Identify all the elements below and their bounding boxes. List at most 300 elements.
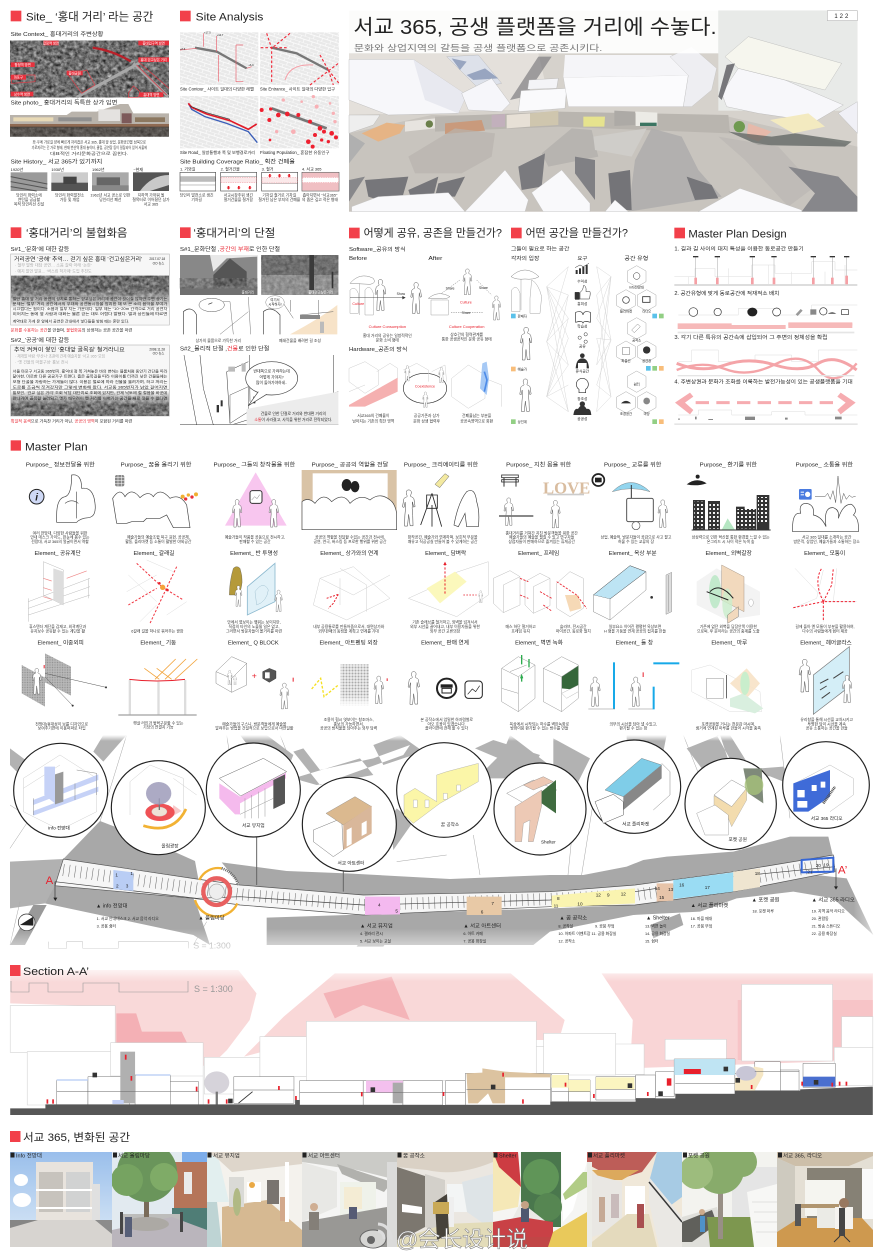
sketch: blocked alley: 어떻게 가야지?	[259, 374, 284, 379]
pink watercolor sky	[10, 965, 873, 1068]
circle: radio: 서교 365 라디오	[811, 815, 843, 822]
element: windows	[588, 662, 679, 709]
label: conflict 1: S#1_‘문화’에 대한 갈등	[11, 245, 69, 253]
timeline: four history photos: 서교 365	[144, 202, 158, 207]
heading: transformed spaces: 서교 365, 변화된 공간	[23, 1131, 130, 1144]
element: art painting facade	[312, 664, 388, 706]
requirement icons: 창조성	[577, 396, 587, 401]
news clipping 2: 도로를 조금씩 쪼겨갔지만 그렇게 변화해 왔다. 서교동 365번지가 낡았 길어지면	[13, 384, 167, 389]
heading: space: 어떤 공간을 만들건가?	[526, 228, 628, 240]
panel: hero aerial render	[349, 10, 857, 212]
element captions row 2: 공유 소통하는 공간을 만들	[806, 726, 848, 731]
panel: sharing, space, master plan design	[349, 227, 858, 425]
panel: site and site analysis	[10, 10, 339, 207]
space type hexagons: 마당	[644, 411, 650, 416]
diagram: coverage ratio strips: 3. 철거	[262, 166, 274, 172]
element captions row 2: 방화이용 환기될 수 있는 방수를 만들	[510, 726, 569, 731]
step 1	[674, 245, 857, 285]
plan labels: 4. 갤러리 전시	[360, 931, 383, 936]
purpose 5: creators	[403, 474, 479, 527]
matrix labels: 각자의 입장	[511, 254, 540, 262]
element: roof	[593, 566, 672, 620]
software sharing labels	[349, 245, 443, 262]
section drawing	[10, 965, 873, 1115]
plan labels: ▲ 포켓 공원	[752, 896, 780, 904]
circle: pocket park	[685, 758, 776, 850]
plan labels: 16. 마을 매대	[691, 916, 713, 921]
space type hexagons: 공작소	[632, 338, 641, 343]
coloured programme rooms: 2	[116, 883, 119, 888]
heading: section	[10, 965, 89, 978]
space type hexagons: info전망대	[629, 285, 644, 290]
sketch captions: 상가의 물품으로 가득찬 거리	[196, 338, 242, 343]
timeline: four history photos: 당인리선 폐선	[99, 197, 122, 202]
aerial photo with red tags: 홍대역 방면	[143, 92, 159, 97]
photo 2: plaza	[112, 1152, 207, 1247]
sketch: blocked alley: 건물로 인한 단절로 거리와 반대편 거리의	[261, 411, 326, 416]
purpose captions: 예술가들이 작품을 공동으로 전시하고,	[225, 535, 285, 540]
purpose headings: Purpose_ 크리에이티를 위한	[404, 461, 478, 469]
sketch: hardware 3: 건폐율남는 부분을	[462, 413, 492, 418]
heading: master plan: Master Plan	[25, 442, 88, 454]
sketch captions	[196, 338, 321, 343]
translucent building shadows	[349, 128, 857, 212]
scale label: S = 1:300	[193, 941, 231, 951]
requirement icons: 공유	[579, 345, 586, 349]
element: shop link	[313, 567, 390, 620]
purpose headings: Purpose_ 그들의 창작물을 위한	[213, 461, 295, 469]
plan labels: 17. 공용 부엌	[691, 923, 713, 928]
sketch: hardware 2: Coexistence	[415, 384, 435, 388]
element captions row 2: 포켓공원을 거니는 천분감 마시며,	[702, 721, 755, 726]
element: forked road	[127, 560, 190, 625]
diagram: coverage ratio strips	[180, 166, 339, 202]
step 4: 4. 주변상권과 문화가 조화를 이룩하는 발전가능성이 있는 공생플랫폼을 기대	[674, 378, 853, 386]
element captions row 1: H 형을 기둥을 연계 공공의 접지를 만들	[604, 628, 666, 633]
space type hexagons: 공연장	[642, 358, 651, 363]
page number	[827, 11, 857, 21]
section buildings	[57, 1059, 835, 1105]
graphic scale	[48, 942, 188, 948]
dark person icons	[93, 1067, 818, 1103]
purpose headings	[26, 461, 853, 469]
coloured programme rooms: 11	[554, 904, 559, 909]
photo labels: 서교 아트센터	[308, 1152, 340, 1160]
street photo right: 홍대걷고싶은거리	[308, 290, 333, 295]
plan labels: 9. 공용 부엌	[595, 923, 615, 928]
timeline: four history photos: 철목터로 이어졌던 상가	[132, 197, 170, 202]
label: physical disconnection: S#2_물리적 단절 ,건물로 인한 단절	[180, 344, 269, 352]
element captions row 2: 햇살 러인과 쌓혁구분할 수 있는	[133, 720, 184, 725]
heading: master plan design: Master Plan Design	[688, 228, 787, 240]
purpose captions: 상상력으로 인한 혁신을 통한 환경을 느낄 수 있는	[692, 535, 770, 540]
requirement icons: 흥미성	[577, 301, 587, 306]
purpose captions: 예술가들의 예술을 펼칠 수 있고 연구자들	[509, 535, 575, 540]
news clipping 2: · ‘옛 건물의 마을구성’ 홍보 전시	[15, 358, 69, 364]
purpose 2: dreams	[113, 475, 198, 528]
label: site context: Site Context_ 홍대거리의 주변상황	[11, 30, 103, 38]
plan labels: 10. 아파트 이벤트장 11. 공용 화장실	[558, 931, 617, 936]
circle: info tower: info 전망대	[48, 824, 70, 831]
element: sales link	[408, 672, 482, 704]
plan labels: 20. 관람동	[812, 916, 829, 921]
element captions row 2: 유리창을 통해 시선을 교차시키고	[800, 717, 853, 722]
plan labels: ▲ Shelter	[646, 916, 670, 922]
photo 3: museum	[207, 1152, 302, 1247]
news clipping 1: 문제는 ‘철부’ 거리 공간에서의 무대와 공연동시장을 방치한 채 또 큰 소리 음악을 부여가	[13, 301, 168, 306]
diagram: after: Culture Cooperation	[449, 324, 485, 329]
title box	[349, 10, 718, 53]
coloured programme rooms: 18	[755, 871, 760, 876]
element captions row 1: 기존에 없던 외벽을 담장안쪽 이용한	[700, 624, 757, 629]
diagram: after: Share	[446, 286, 455, 290]
element headings row 2: Element_ 들 창	[616, 639, 653, 647]
timeline: four history photos	[11, 166, 170, 207]
captions: site analysis maps: Site Road_ 일방통행과 쪽 및 보행경로거리	[180, 149, 255, 155]
captions: site analysis maps	[180, 86, 335, 155]
circle: dream workshop	[397, 743, 491, 837]
element headings row 1: Element_ 갈래길	[133, 549, 175, 557]
photo 4: art center	[302, 1152, 397, 1247]
step 3	[674, 333, 857, 378]
diagram: coverage ratio strips: 1. 기와길	[180, 166, 196, 172]
map: site entrance	[260, 32, 339, 85]
element captions row 1: 다수의 사람들에게 쉼터 제공	[802, 628, 848, 633]
photo 6: shelter	[493, 1152, 587, 1247]
element captions row 2: 조용이 협시 엿보이는 창조마스,	[324, 717, 374, 722]
diagram: after: 통한 공생공작인 문화 공유 형태	[442, 337, 492, 342]
fade edges	[0, 735, 890, 965]
map: site contour	[180, 30, 258, 85]
sketch: blocked alley: 많이 돌아가야하네..	[256, 380, 287, 385]
page number: 122	[834, 14, 850, 20]
element headings row 1: Element_ 프레임	[518, 549, 559, 557]
software sharing labels: After	[428, 256, 443, 262]
element headings row 2	[38, 639, 852, 647]
aerial photo with red tags: 홍대 걷고싶은 거리	[140, 57, 167, 62]
wall ticks	[63, 863, 833, 905]
element captions row 2: 공공의 방직물을 담아주는 외부 담벽	[320, 726, 378, 731]
plan labels: 6. 아트 카페	[463, 931, 483, 936]
north compass	[18, 914, 35, 931]
panel: plan with axonometric circles	[0, 735, 890, 965]
panel: section A-A'	[10, 965, 873, 1115]
purpose captions: 허물 수 있는 교류의 장	[618, 539, 654, 544]
circle: plaza: 올림광장	[161, 843, 179, 850]
diagram: after: 상호간의 협력관계를	[450, 332, 484, 337]
diagram: before: Culture	[352, 302, 364, 306]
element captions row 1: 직접의 타인의 노출될 일은 없고,	[228, 624, 280, 629]
element headings row 1: Element_ 상가와의 연계	[320, 549, 378, 557]
element captions row 2: 아오 호광이 있겠습니다.	[427, 721, 466, 726]
coloured programme rooms: 3	[126, 883, 129, 888]
circle: museum	[206, 743, 300, 837]
red figures	[47, 1055, 847, 1104]
panel: transformed spaces	[10, 1131, 873, 1247]
label: site photo: Site photo_ 홍대거리의 독특한 상가 입면	[11, 99, 117, 107]
coloured programme rooms: 9	[607, 892, 610, 897]
shop row along the street	[362, 111, 852, 147]
timeline: four history photos: 1962년 서교 공소로 인한	[90, 193, 131, 198]
news clipping 2: 추억 켜켜이 쌓인 ‘홍대앞 골목길’ 철거라니요	[14, 346, 125, 354]
label: conflict 2: S#2_‘공공’에 대한 갈등	[11, 336, 69, 344]
step 2: 2. 공간유형에 맞게 동로공간에 적재적소 배치	[674, 289, 780, 297]
plan labels: 8. 공작실	[558, 923, 574, 928]
plan labels: 1. 서교 안내데스크 2. 서교 음악 라디오	[97, 916, 159, 921]
purpose captions: 활동, 플리마켓 등 소통이 활발한 야외공간	[125, 539, 192, 544]
purpose captions: 전망대, 서교 365의 얼굴이면서 역할	[31, 539, 89, 544]
element: q block	[216, 657, 294, 709]
element captions row 2: 투명한 담이 시선을 계속	[807, 721, 846, 726]
circle: dream workshop: 꿈 공작소	[441, 821, 460, 828]
foreground white buildings	[352, 170, 802, 212]
element captions row 1: 안에서 엿보이는 행위는 보이지만,	[227, 620, 281, 625]
element captions row 2	[35, 717, 853, 731]
timeline: four history photos: 당인리 화력소에	[16, 193, 42, 198]
element captions row 1: 길에 돌아 엔 모퉁이 부분을 활용하여,	[795, 624, 855, 629]
software sharing labels: Before	[349, 256, 367, 262]
timeline: four history photos: 가동 및 개업	[60, 197, 80, 202]
space type hexagons	[617, 266, 664, 424]
element headings row 2: Element_ 기둥	[140, 639, 176, 647]
coloured programme rooms: 16	[679, 883, 685, 888]
element captions row 1: 그러면서 방문자들이 볼거리를 마련	[226, 628, 282, 633]
map: site contour: +17.5	[204, 30, 211, 34]
news clipping 1: 시끄럽다는 점이다. 소음과 일부 지는 가운데다. 일부 제는 “10~20m 간격으로 거리 공연자	[13, 306, 168, 311]
text block: site description: 대표적인 거리문화공간으로 꼽힌다.	[50, 151, 128, 156]
photo 8: pocket park	[682, 1152, 777, 1247]
text block: site description: 가로지르는 긴 가로 형태, 현재 번산역 홍대 놀이터, 클럽, 공연장 등이 밀집되어 있어 서울에	[32, 145, 147, 150]
aerial photo with red tags	[10, 40, 169, 97]
plan labels: 12. 공작소	[558, 938, 576, 943]
element captions row 2: 본 공작소에서 엄밀한 하자렴벌로	[420, 717, 473, 722]
sketch: pedestrian street: 여기서	[270, 297, 280, 302]
diagram: coverage ratio strips: 서교시장주위 생긴	[224, 193, 253, 198]
requirement icons	[573, 263, 591, 421]
news clipping 1: 이어지는 동에 옆 사람과 대화는 물론 걷는 대도 어렵다 말했다. 벌과 상인들에 따르면	[13, 311, 167, 316]
element captions row 1: 일부요소 이어진 평평한 옥상보면	[609, 624, 662, 629]
element captions row 2: 전망대(휴대성이 보를 디자인으로	[35, 721, 88, 726]
news clipping 1: · 예지 발언 발표… ‘버스킹 허가제’ 도입 추진도	[15, 268, 92, 274]
map: site contour: +14.7	[217, 33, 224, 37]
circle: flea market: 서교 플리마켓	[622, 821, 649, 828]
purpose headings: Purpose_ 교류를 위한	[604, 461, 661, 469]
plan labels: 14. 공용 화장실	[645, 931, 671, 936]
diagram: before: 문화 소비 형태	[376, 338, 399, 343]
scale text: S = 1:300	[194, 984, 233, 994]
diagram: coverage ratio strips: 철거된 남은 부지의 건폐율	[258, 197, 301, 202]
element captions row 2: 보여주기면에 이용퍼파로 타입	[38, 726, 86, 731]
element captions row 2: 기당의 연결지 기능	[143, 725, 174, 730]
news clipping 2	[11, 345, 169, 416]
diagram: coverage ratio strips: 기차길 철거로 기차길	[262, 193, 297, 198]
coloured programme rooms: 4	[378, 903, 381, 908]
space type hexagons: 조경공간	[620, 411, 632, 416]
floor slabs	[57, 1072, 799, 1093]
step 2	[674, 289, 857, 333]
section markers: A’	[838, 864, 847, 876]
icon: watermark logo	[360, 1224, 391, 1248]
plan labels: 7. 공용 화장실	[463, 938, 487, 943]
title: 서교 365, 공생 플랫폼을 거리에 수놓다.	[353, 16, 717, 39]
programme colours	[57, 1052, 835, 1105]
sketch: hardware 2: 공공기존과 상가	[414, 413, 440, 418]
heading: site analysis: Site Analysis	[196, 12, 264, 24]
purpose headings: Purpose_ 정보전달을 위한	[26, 461, 95, 469]
space type hexagons: 파출선	[621, 358, 631, 363]
space type hexagons: 쉼터	[634, 382, 640, 387]
element captions row 1: 마이공간, 동로화 철치	[556, 628, 591, 633]
street elevation photo	[10, 104, 169, 137]
coloured programme rooms: 5	[395, 908, 398, 913]
step 1: 1. 길과 길 사이의 대지 특성을 이용한 동로공간 만들기	[674, 245, 804, 253]
element: wall	[408, 562, 488, 617]
coloured programme rooms: 7	[491, 901, 494, 906]
ground	[10, 1087, 873, 1115]
element headings row 2: Element_ 이중외피	[38, 639, 84, 647]
element captions row 2: 예술가들의 구스니, 방문객들에게 예술을	[222, 721, 287, 726]
street photo left: 홍대거리	[242, 290, 254, 295]
purpose captions: 공공의 역할을 전달할 수있는 공간과 전시에,	[315, 535, 385, 540]
coloured programme rooms: 6	[481, 909, 484, 914]
gray roads	[10, 735, 873, 947]
element captions row 2: 쉼거에 연계된 마루를 만들어 시각을 충족	[696, 726, 761, 731]
photo labels	[10, 1152, 822, 1160]
coloured programme rooms: 17	[705, 885, 710, 890]
plan labels: 5. 서교 보이는 교실	[360, 938, 392, 943]
aerial photo with red tags: 홍대공원	[69, 70, 81, 75]
section markers: A	[46, 875, 54, 887]
panel: master plan purposes and elements	[11, 440, 860, 731]
element headings row 2: Element_ 마루	[711, 639, 747, 647]
map: site contour: +8.6	[180, 47, 186, 51]
purpose headings: Purpose_ 지친 몸을 위한	[506, 461, 571, 469]
element headings row 1: Element_ 공유계단	[35, 549, 82, 557]
red caption 1: 문화를 수용하는 공간을 만들며, 불협화음의 상생하는 공존 공간을 마련	[11, 327, 133, 333]
purpose captions: 창작공간, 예술가와 연계하며, 보호적 부분을	[408, 535, 478, 540]
requirement icons: 휴식공간	[576, 369, 590, 374]
purpose captions	[30, 530, 860, 544]
coloured programme rooms: 21	[807, 870, 813, 875]
step 4	[674, 378, 858, 425]
circle: shelter	[494, 763, 586, 855]
element headings row 1: Element_ 반 투명성	[230, 549, 278, 557]
matrix labels: 요구	[577, 255, 588, 262]
label: coverage ratio: Site Building Coverage Ratio_ 획잔 건폐율	[180, 158, 295, 166]
purpose captions: 서교 365 일대를 소개하는 공간	[802, 535, 852, 540]
purpose captions: 상업, 예술적, 방문자들이 공감으로 사고 팔고	[601, 535, 672, 540]
purpose headings: Purpose_ 공공의 역할을 전달	[312, 461, 388, 469]
element captions row 1: 프레임 유지	[511, 628, 530, 633]
timeline: four history photos: 1962년	[92, 166, 105, 172]
stakeholders: 판매자	[518, 314, 527, 319]
plan labels: ▲ 서교 뮤지엄	[360, 921, 393, 929]
requirement icons: 공공성	[577, 416, 587, 421]
section markers	[46, 864, 847, 901]
element: column	[118, 659, 197, 715]
captions: site analysis maps: Site Entrance_ 사이트 일대의 다양한 입구	[260, 86, 335, 92]
element captions row 2: 알려주는 방법을 건설적으로 보답으로서 마연일할	[215, 726, 294, 731]
coloured programme rooms: 15	[659, 895, 665, 900]
element headings row 2: Element_ Q BLOCK	[228, 641, 279, 647]
purpose headings: Purpose_ 꿈을 올리기 위한	[121, 461, 191, 469]
element captions row 1: 으로써, 후 문이라는 공간의 중계를 노출	[697, 628, 760, 633]
element headings row 1: Element_ 외벽갈장	[706, 549, 752, 557]
space type hexagons: 올리마켓	[620, 308, 632, 313]
aerial photo with red tags: 마포구	[14, 75, 23, 80]
news clipping 1: 거리공연 ‘공해’ 추억… 걷기 싶은 홍대 ‘건고싶은거리’	[14, 255, 142, 263]
photo 5: workshop	[397, 1152, 493, 1247]
plan labels: 22. 공용 화장실	[812, 931, 837, 936]
coloured programme rooms: 13	[668, 887, 674, 892]
purpose captions: 안내 데스크 가이드, 한눈에 봄수 있는	[30, 535, 90, 540]
plan labels: ▲ 서교 플리마켓	[691, 901, 728, 909]
sketch: hardware 1: 남아지는 기존의 획잔 영역	[352, 419, 395, 424]
news clipping 1: 일반 홍대 앞 거리 공연의 성지로 통하는 걷고싶은 거리에 공연이 끊이질 않지만 주변 상가는	[13, 296, 168, 301]
matrix labels: 공간 유형	[624, 255, 649, 262]
sketch: blocked alley	[180, 355, 338, 425]
red caption 2: 획일적 옹색으로 가득찬 거리가 아닌, 공공의 영역이 포함된 거리를 마련	[11, 418, 133, 424]
coloured programme rooms: 12	[621, 892, 626, 897]
sketch captions: 폐쇄건물을 배려한 길 조성	[279, 338, 321, 343]
element headings row 2: Element_ 헤어글라스	[800, 639, 852, 647]
plan labels	[96, 896, 855, 943]
watermark: @会长设计说	[396, 1227, 528, 1252]
circle: radio	[783, 742, 869, 828]
purpose captions: 상점자들이 판매하므로 즐겨있는 휴게공간	[508, 539, 575, 544]
street building strip	[55, 855, 835, 915]
heading: disharmony: ‘홍대거리’의 불협화음	[26, 227, 128, 240]
sketch: blocked alley: 소통이 사라졌고, 사익을 위한 거리로 전락되었다.	[254, 417, 332, 422]
news clipping 2: 만나가며 골목길 눌러되고 옛가 배우려이 옛 거리를 이어가는 공간을 새로 짓을 수 있다면	[13, 395, 167, 400]
aerial photo with red tags: 합정역 방면	[15, 62, 31, 67]
purpose 1: information: i	[35, 492, 38, 503]
coloured programme rooms: 19	[823, 862, 829, 867]
element: shared stairs	[28, 562, 90, 622]
aerial photo with red tags: 상수역 방면	[14, 91, 30, 96]
photo labels: Shelter	[499, 1154, 517, 1160]
requirement icons: 수익성	[577, 279, 587, 284]
diagram: before: 홍대 거리의 공유는 일방적적인	[363, 333, 412, 338]
sketch: hardware 3: 공공속영역으로 회환	[460, 419, 494, 424]
purpose 7: exchange	[592, 474, 668, 530]
news clipping 2: 모형 단골을 자랑하는 가게들이 많다. 이용은 철로에 따라 건물을 올려가며, 하고 꺼리는	[13, 379, 168, 384]
text block: site description: 좌·우에 가로길 양에 빠르게 자리잡은 서교 365, 홍대 앞 상업, 문화공간을 남북으로	[33, 139, 146, 144]
matrix labels: 그들이 필요로 하는 공간	[511, 245, 570, 253]
diagram: coverage ratio strips: 4. 서교 365	[302, 166, 322, 172]
timeline: four history photos: ~현재	[133, 166, 143, 172]
plan labels: 21. 방송 스튜디오	[812, 923, 841, 928]
section line	[55, 867, 835, 905]
photo labels: 꿈 공작소	[403, 1152, 425, 1160]
diagram: after: Culture	[460, 300, 472, 304]
photo labels: 포켓 공원	[688, 1152, 710, 1160]
purpose 3: creations	[225, 472, 287, 527]
element: corner	[793, 568, 857, 622]
purpose captions: 판매할 수 있는 공간	[239, 539, 271, 544]
element captions row 2: 옥상에서 시작되는 하수를 벽만녹화로	[510, 721, 570, 726]
purpose captions: 여러 전망대, 다양한 사람들을 위한	[33, 530, 88, 535]
purpose 8: ventilation	[687, 475, 771, 530]
plan labels: 13. 벽면 놀이	[645, 923, 667, 928]
news clipping 2: · 재개발 바람 ‘부산나’ 초관에 건제 예술지불 ‘서교 365’ 모임	[15, 352, 105, 358]
purpose 6: rest: LOVE	[543, 478, 590, 497]
coloured programme rooms: 14	[655, 886, 660, 891]
news clipping 1: · 철부 발랑 대담 공연… 소음 갈락 아래 ‘논란’	[15, 262, 92, 268]
element captions row 1: 슬라브, 전시공간	[560, 624, 587, 629]
circle: art center	[302, 777, 396, 871]
diagram: after: Share	[462, 311, 471, 315]
